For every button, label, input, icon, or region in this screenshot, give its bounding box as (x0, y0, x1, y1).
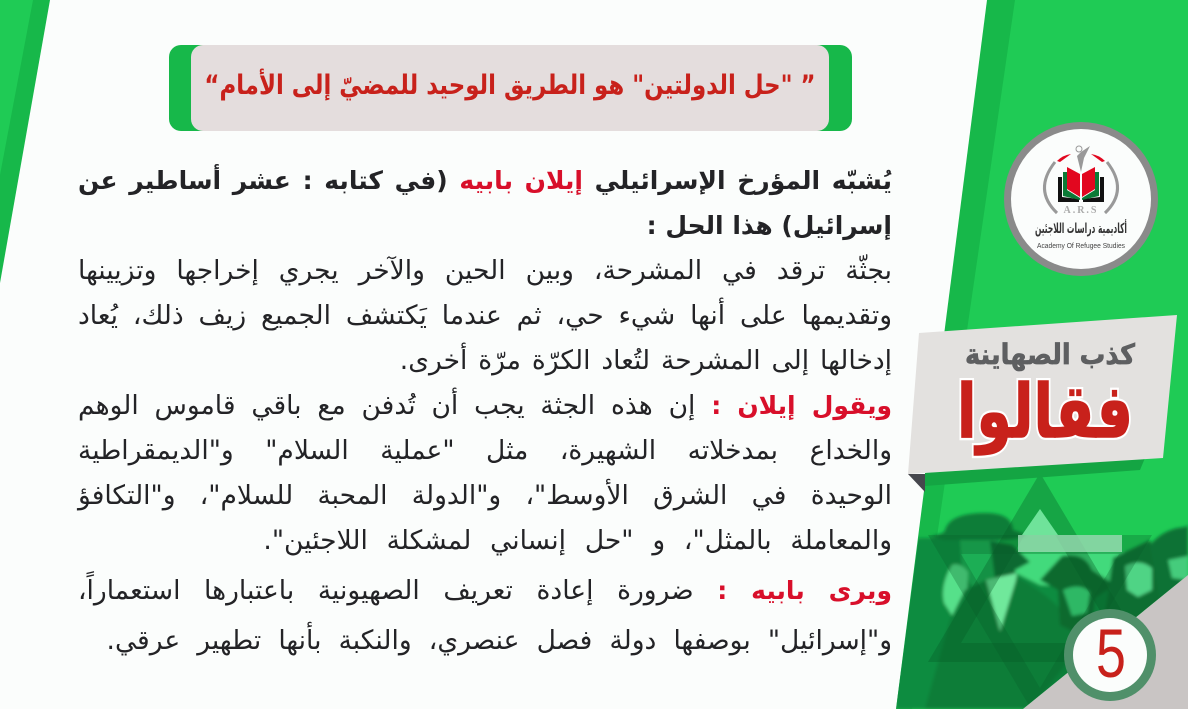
right green panel (896, 0, 1188, 709)
line 10: ويرى بابيه : ضرورة إعادة تعريف الصهيونية باعتبارها استعماراً، (78, 575, 892, 606)
gray corner (1023, 575, 1188, 709)
logo initials: A.R.S (1063, 205, 1099, 216)
light star band (1018, 535, 1122, 552)
banner shadow strip (925, 458, 1145, 486)
banner fold (908, 474, 925, 492)
line 8: الوحيدة في الشرق الأوسط"، و"الدولة المحبة للسلام"، و"التكافؤ (78, 480, 892, 511)
photo of crowd with star (896, 473, 1188, 709)
number badge: 5 (1096, 616, 1126, 693)
body text (76, 164, 892, 656)
line 7: والخداع بمدخلاته الشهيرة، مثل "عملية السلام" و"الديمقراطية (78, 435, 892, 466)
man left collar (986, 573, 1017, 632)
sky patch (1012, 552, 1125, 588)
icon: open book (1044, 146, 1118, 213)
man left beard (990, 541, 1030, 585)
man left hat (930, 513, 1027, 540)
line 9: والمعاملة بالمثل"، و "حل إنساني لمشكلة اللاجئين". (263, 525, 892, 556)
line 4: وتقديمها على أنها شيء حي، ثم عندما يَكتشف الجميع زيف ذلك، يُعاد (78, 300, 892, 331)
line 11: و"إسرائيل" بوصفها دولة فصل عنصري، والنكبة بأنها تطهير عرقي. (107, 625, 892, 656)
banner headline: فقالوا (957, 369, 1133, 456)
number badge (1064, 609, 1156, 701)
banner subtitle: كذب الصهاينة (965, 338, 1136, 371)
line 3: بجثّة ترقد في المشرحة، وبين الحين والآخر يجري إخراجها وتزيينها (78, 255, 892, 286)
line 2: إسرائيل) هذا الحل : (647, 211, 892, 240)
man right (1106, 539, 1160, 617)
man centre (1039, 554, 1112, 630)
line 5: إدخالها إلى المشرحة لتُعاد الكرّة مرّة أخرى. (400, 345, 892, 376)
man left face (960, 540, 996, 586)
man far right (1150, 527, 1188, 600)
man left coat (926, 578, 1071, 708)
logo badge (1004, 122, 1158, 276)
logo english name: Academy Of Refugee Studies (1037, 243, 1125, 250)
star of david (928, 477, 1108, 662)
banner headline: فقالوا (957, 369, 1133, 456)
crowd base (896, 525, 1188, 709)
man left hand (943, 564, 968, 620)
banner (908, 315, 1177, 474)
line 1: يُشبّه المؤرخ الإسرائيلي إيلان بابيه (في كتابه : عشر أساطير عن (78, 166, 892, 195)
line 6: ويقول إيلان : إن هذه الجثة يجب أن تُدفن مع باقي قاموس الوهم (78, 390, 892, 421)
title banner (169, 45, 852, 131)
title text: ” "حل الدولتين" هو الطريق الوحيد للمضيّ إلى الأمام“ (204, 70, 816, 101)
left green corner (0, 0, 50, 283)
